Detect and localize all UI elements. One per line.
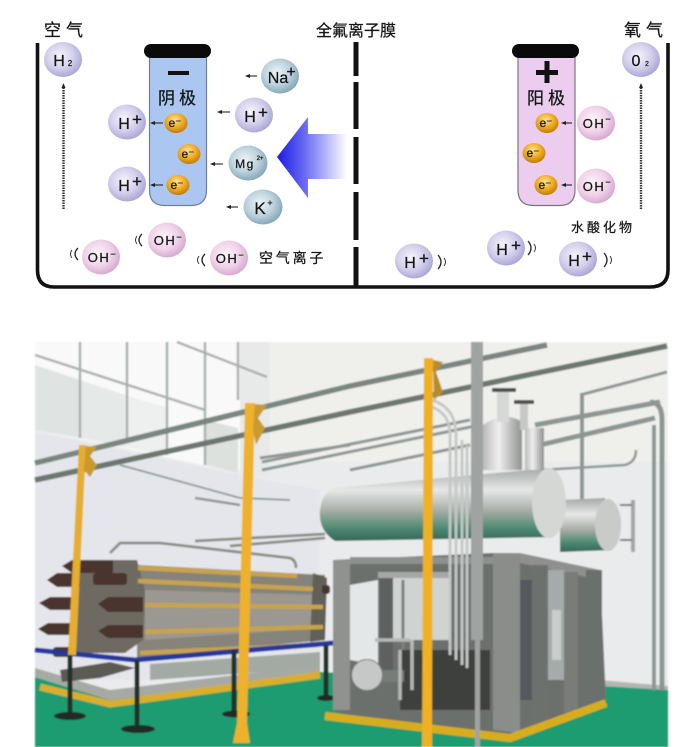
ion: H2 [44, 42, 82, 77]
overhead beams [35, 345, 667, 480]
process skid [333, 553, 606, 737]
ion: K+: + [267, 198, 273, 208]
factory window [35, 342, 270, 477]
ion: H+ cathode upper: + [132, 110, 142, 129]
label: oxygen gas: 氧气 [624, 21, 668, 40]
ion: OH- anode lower: OH [583, 179, 605, 194]
yellow tie rods [138, 568, 323, 653]
ion: K+: K [254, 199, 266, 218]
rising gas arrow left [62, 87, 65, 209]
dark bolts [38, 560, 330, 657]
ion: H+ right bottom right [559, 242, 597, 276]
photo background wall [35, 342, 668, 747]
ion: H+ right bottom left [395, 244, 433, 278]
electrons: e⁻ [170, 178, 184, 192]
small ion arrows [154, 76, 572, 207]
ion: OH- left [82, 240, 120, 274]
ion: H+ cathode upper [108, 104, 146, 140]
ion: H+ right bottom right: H [568, 253, 580, 270]
ion: OH- anode lower [577, 168, 615, 204]
yellow post left [68, 445, 97, 655]
ion: Mg2+: Mg [235, 157, 255, 171]
ion: H+ upper right of cathode [235, 98, 273, 132]
yellow post right [422, 358, 443, 747]
electrons: e⁻ [168, 116, 182, 130]
ion: H+ right bottom left: H [404, 255, 416, 272]
grey column [471, 342, 483, 747]
label: hydrogen gas: 空气 [44, 21, 88, 40]
ion: OH- left: OH [88, 250, 110, 265]
ion: OH- anode upper: OH [583, 116, 605, 131]
tall pipe bundle [425, 400, 467, 668]
electrons: e⁻ [539, 116, 553, 130]
ion: H+ right bottom centre [487, 230, 525, 266]
label: membrane: 全氟离子膜 [316, 22, 396, 40]
ion: Mg2+: 2+ [257, 156, 264, 162]
ion: H+ cathode lower [108, 166, 146, 202]
skirting [35, 665, 320, 700]
ion: H+ right bottom right: + [582, 247, 592, 266]
ion: Na+ [261, 58, 299, 94]
ion: OH- right of centre [210, 240, 248, 276]
ion: O2: 2 [645, 61, 649, 68]
yellow skid curb [325, 703, 606, 738]
ion: Mg2+ [228, 146, 268, 180]
barrier stands [54, 645, 335, 733]
ion: H+ upper right of cathode: + [258, 103, 268, 122]
ion: H2: 2 [68, 59, 73, 68]
ion: H+ right bottom centre: + [511, 236, 521, 255]
cathode electrode: 阴极 [158, 89, 200, 108]
membrane dashed line [354, 42, 358, 287]
second silver tank [560, 498, 633, 552]
vertical separator vessels [483, 388, 544, 470]
ion: K+ [244, 190, 282, 224]
ion: OH- centre: − [176, 232, 182, 242]
label: hydroxide: 水酸化物 [571, 220, 635, 235]
lower left wall shade [35, 432, 320, 680]
ion: H+ cathode lower: H [118, 178, 130, 195]
ion: OH- anode upper [577, 106, 615, 140]
ion: H+ cathode lower: + [132, 172, 142, 191]
cathode electrode [144, 44, 211, 206]
ion: H+ upper right of cathode: H [244, 109, 256, 126]
electrons: e⁻ [526, 146, 540, 160]
electrons [164, 113, 558, 195]
anode electrode [512, 44, 579, 206]
ripple marks [70, 234, 612, 269]
ion: H+ right bottom left: + [419, 249, 429, 268]
electrolysis diagram [38, 21, 668, 287]
label: air ions: 空气离子 [259, 250, 326, 266]
rising gas arrow right [640, 87, 642, 209]
main silver tank [320, 468, 566, 541]
bright upper wall [270, 342, 668, 462]
ion: OH- anode upper: − [605, 114, 611, 124]
wall piping [120, 372, 667, 690]
electrolytic tank outline [38, 43, 668, 287]
stack supports [60, 662, 135, 682]
ion: H+ right bottom centre: H [496, 242, 508, 259]
flange disc [352, 660, 382, 690]
ion: Na+: Na [268, 70, 288, 87]
anode electrode: 阳极 [527, 89, 569, 108]
ion: OH- right of centre: OH [216, 251, 238, 266]
electrons: e⁻ [181, 147, 195, 161]
ion: OH- centre [148, 222, 186, 258]
electrolyser stack [38, 534, 330, 682]
top feed pipes [110, 534, 325, 568]
big blue arrow [277, 117, 347, 198]
ion: Na+: + [286, 64, 296, 81]
ion: OH- left: − [110, 249, 116, 259]
ion: OH- centre: OH [154, 233, 176, 248]
ion: O2: 0 [632, 53, 641, 70]
photo: electrolyser installation [35, 342, 668, 747]
yellow floor curb left [40, 675, 320, 704]
electrons: e⁻ [538, 178, 552, 192]
green floor [35, 672, 668, 747]
ion: O2 [622, 42, 660, 77]
ion: OH- right of centre: − [238, 250, 244, 260]
ion: OH- anode lower: − [605, 177, 611, 187]
yellow post centre [233, 403, 267, 743]
ion: H+ cathode upper: H [118, 116, 130, 133]
blue barrier [35, 643, 333, 660]
ion: H2: H [53, 53, 65, 70]
